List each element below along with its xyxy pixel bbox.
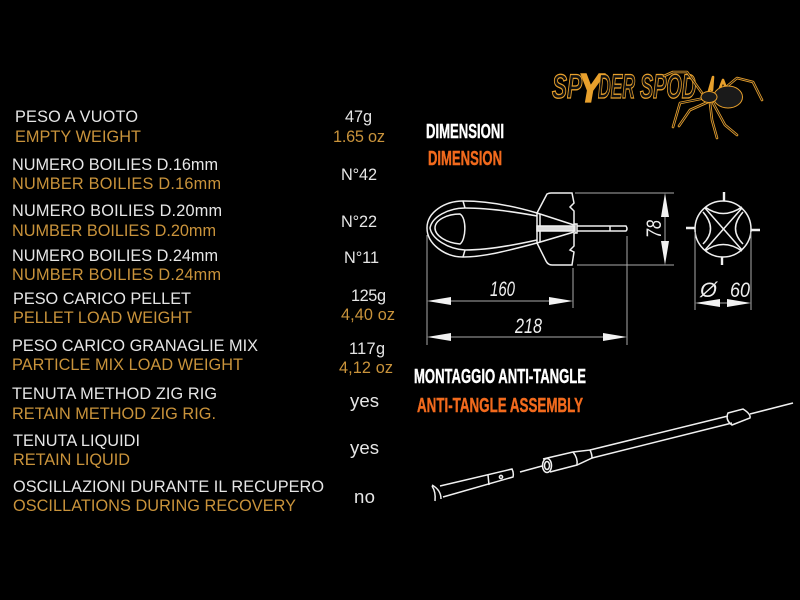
icon: spider bbox=[664, 72, 762, 138]
row: oscillations: OSCILLAZIONI DURANTE IL RECUPERO bbox=[13, 478, 324, 496]
row: particle mix load: PARTICLE MIX LOAD WEIGHT bbox=[12, 356, 243, 374]
row: pellet load: 4,40 oz bbox=[341, 306, 395, 324]
row: empty weight bbox=[15, 108, 385, 146]
row: empty weight: 1.65 oz bbox=[333, 128, 385, 146]
row: pellet load: PELLET LOAD WEIGHT bbox=[13, 309, 192, 327]
sleeve bbox=[727, 409, 750, 425]
row: boilies 24mm: NUMERO BOILIES D.24mm bbox=[12, 247, 218, 265]
row: boilies 20mm bbox=[12, 202, 377, 240]
logo: Spyder Spod bbox=[552, 65, 762, 138]
row: particle mix load: PESO CARICO GRANAGLIE MIX bbox=[12, 337, 258, 355]
dimension: 160 bbox=[427, 235, 573, 345]
logo wordmark bbox=[552, 65, 696, 111]
row: pellet load bbox=[13, 287, 395, 327]
heading: anti-tangle assembly: ANTI-TANGLE ASSEMBLY bbox=[417, 395, 583, 417]
technical drawing: anti-tangle assembly bbox=[432, 403, 793, 501]
row: retain method zig rig: RETAIN METHOD ZIG RIG. bbox=[12, 405, 216, 423]
heading: dimension: DIMENSION bbox=[428, 148, 502, 170]
dart fins bbox=[537, 193, 574, 265]
row: empty weight: 47g bbox=[345, 108, 372, 126]
row: boilies 16mm bbox=[12, 156, 377, 193]
row: retain liquid: yes bbox=[350, 437, 379, 458]
row: boilies 24mm bbox=[12, 247, 379, 284]
row: oscillations bbox=[13, 478, 375, 515]
row: retain liquid: TENUTA LIQUIDI bbox=[13, 432, 140, 450]
dimension: diameter 60 bbox=[695, 232, 751, 310]
dart body bbox=[427, 201, 537, 257]
wire tip bbox=[750, 403, 793, 414]
row: retain method zig rig: TENUTA METHOD ZIG RIG bbox=[12, 385, 217, 403]
dimension: 218 bbox=[427, 236, 627, 345]
row: boilies 20mm: NUMERO BOILIES D.20mm bbox=[12, 202, 222, 220]
dimension: diameter 60: Ø bbox=[699, 279, 719, 302]
row: boilies 16mm: NUMBER BOILIES D.16mm bbox=[12, 175, 221, 193]
row: retain method zig rig: yes bbox=[350, 390, 379, 411]
technical drawing: side view with dimensions bbox=[427, 192, 760, 345]
row: pellet load: 125g bbox=[351, 287, 386, 305]
row: particle mix load: 117g bbox=[349, 340, 385, 358]
row: empty weight: PESO A VUOTO bbox=[15, 108, 138, 126]
row: particle mix load bbox=[12, 337, 393, 377]
row: boilies 20mm: NUMBER BOILIES D.20mm bbox=[12, 222, 216, 240]
row: boilies 16mm: N°42 bbox=[341, 166, 377, 184]
row: boilies 24mm: N°11 bbox=[344, 249, 379, 267]
panel: specification table bbox=[12, 108, 395, 515]
row: retain liquid bbox=[13, 432, 379, 469]
dimension: 218: 218 bbox=[514, 315, 542, 338]
logo wordmark: SP bbox=[552, 68, 582, 106]
short wire bbox=[520, 466, 542, 472]
logo wordmark: SPOD bbox=[640, 68, 696, 106]
row: boilies 24mm: NUMBER BOILIES D.24mm bbox=[12, 266, 221, 284]
heading: montaggio anti-tangle: MONTAGGIO ANTI-TANGLE bbox=[414, 366, 586, 388]
row: empty weight: EMPTY WEIGHT bbox=[15, 128, 141, 146]
dimension: 78: 78 bbox=[643, 220, 666, 238]
long tube bbox=[590, 416, 732, 458]
dimension: 160: 160 bbox=[490, 278, 515, 301]
row: oscillations: no bbox=[354, 486, 375, 507]
dart rod bbox=[575, 224, 627, 233]
end view: circle with cross bbox=[686, 192, 760, 265]
row: boilies 16mm: NUMERO BOILIES D.16mm bbox=[12, 156, 218, 174]
row: pellet load: PESO CARICO PELLET bbox=[13, 290, 191, 308]
cone and large cylinder bbox=[542, 450, 592, 472]
lower connector tube bbox=[432, 469, 513, 501]
row: oscillations: OSCILLATIONS DURING RECOVERY bbox=[13, 497, 296, 515]
row: retain method zig rig bbox=[12, 385, 379, 423]
row: retain liquid: RETAIN LIQUID bbox=[13, 451, 130, 469]
row: particle mix load: 4,12 oz bbox=[339, 359, 393, 377]
dimension: diameter 60: 60 bbox=[730, 279, 750, 302]
heading: dimensioni: DIMENSIONI bbox=[426, 121, 504, 143]
logo wordmark: DER bbox=[598, 68, 635, 106]
dimension: 78 bbox=[575, 193, 674, 265]
row: boilies 20mm: N°22 bbox=[341, 213, 377, 231]
logo wordmark: Y bbox=[578, 65, 605, 111]
